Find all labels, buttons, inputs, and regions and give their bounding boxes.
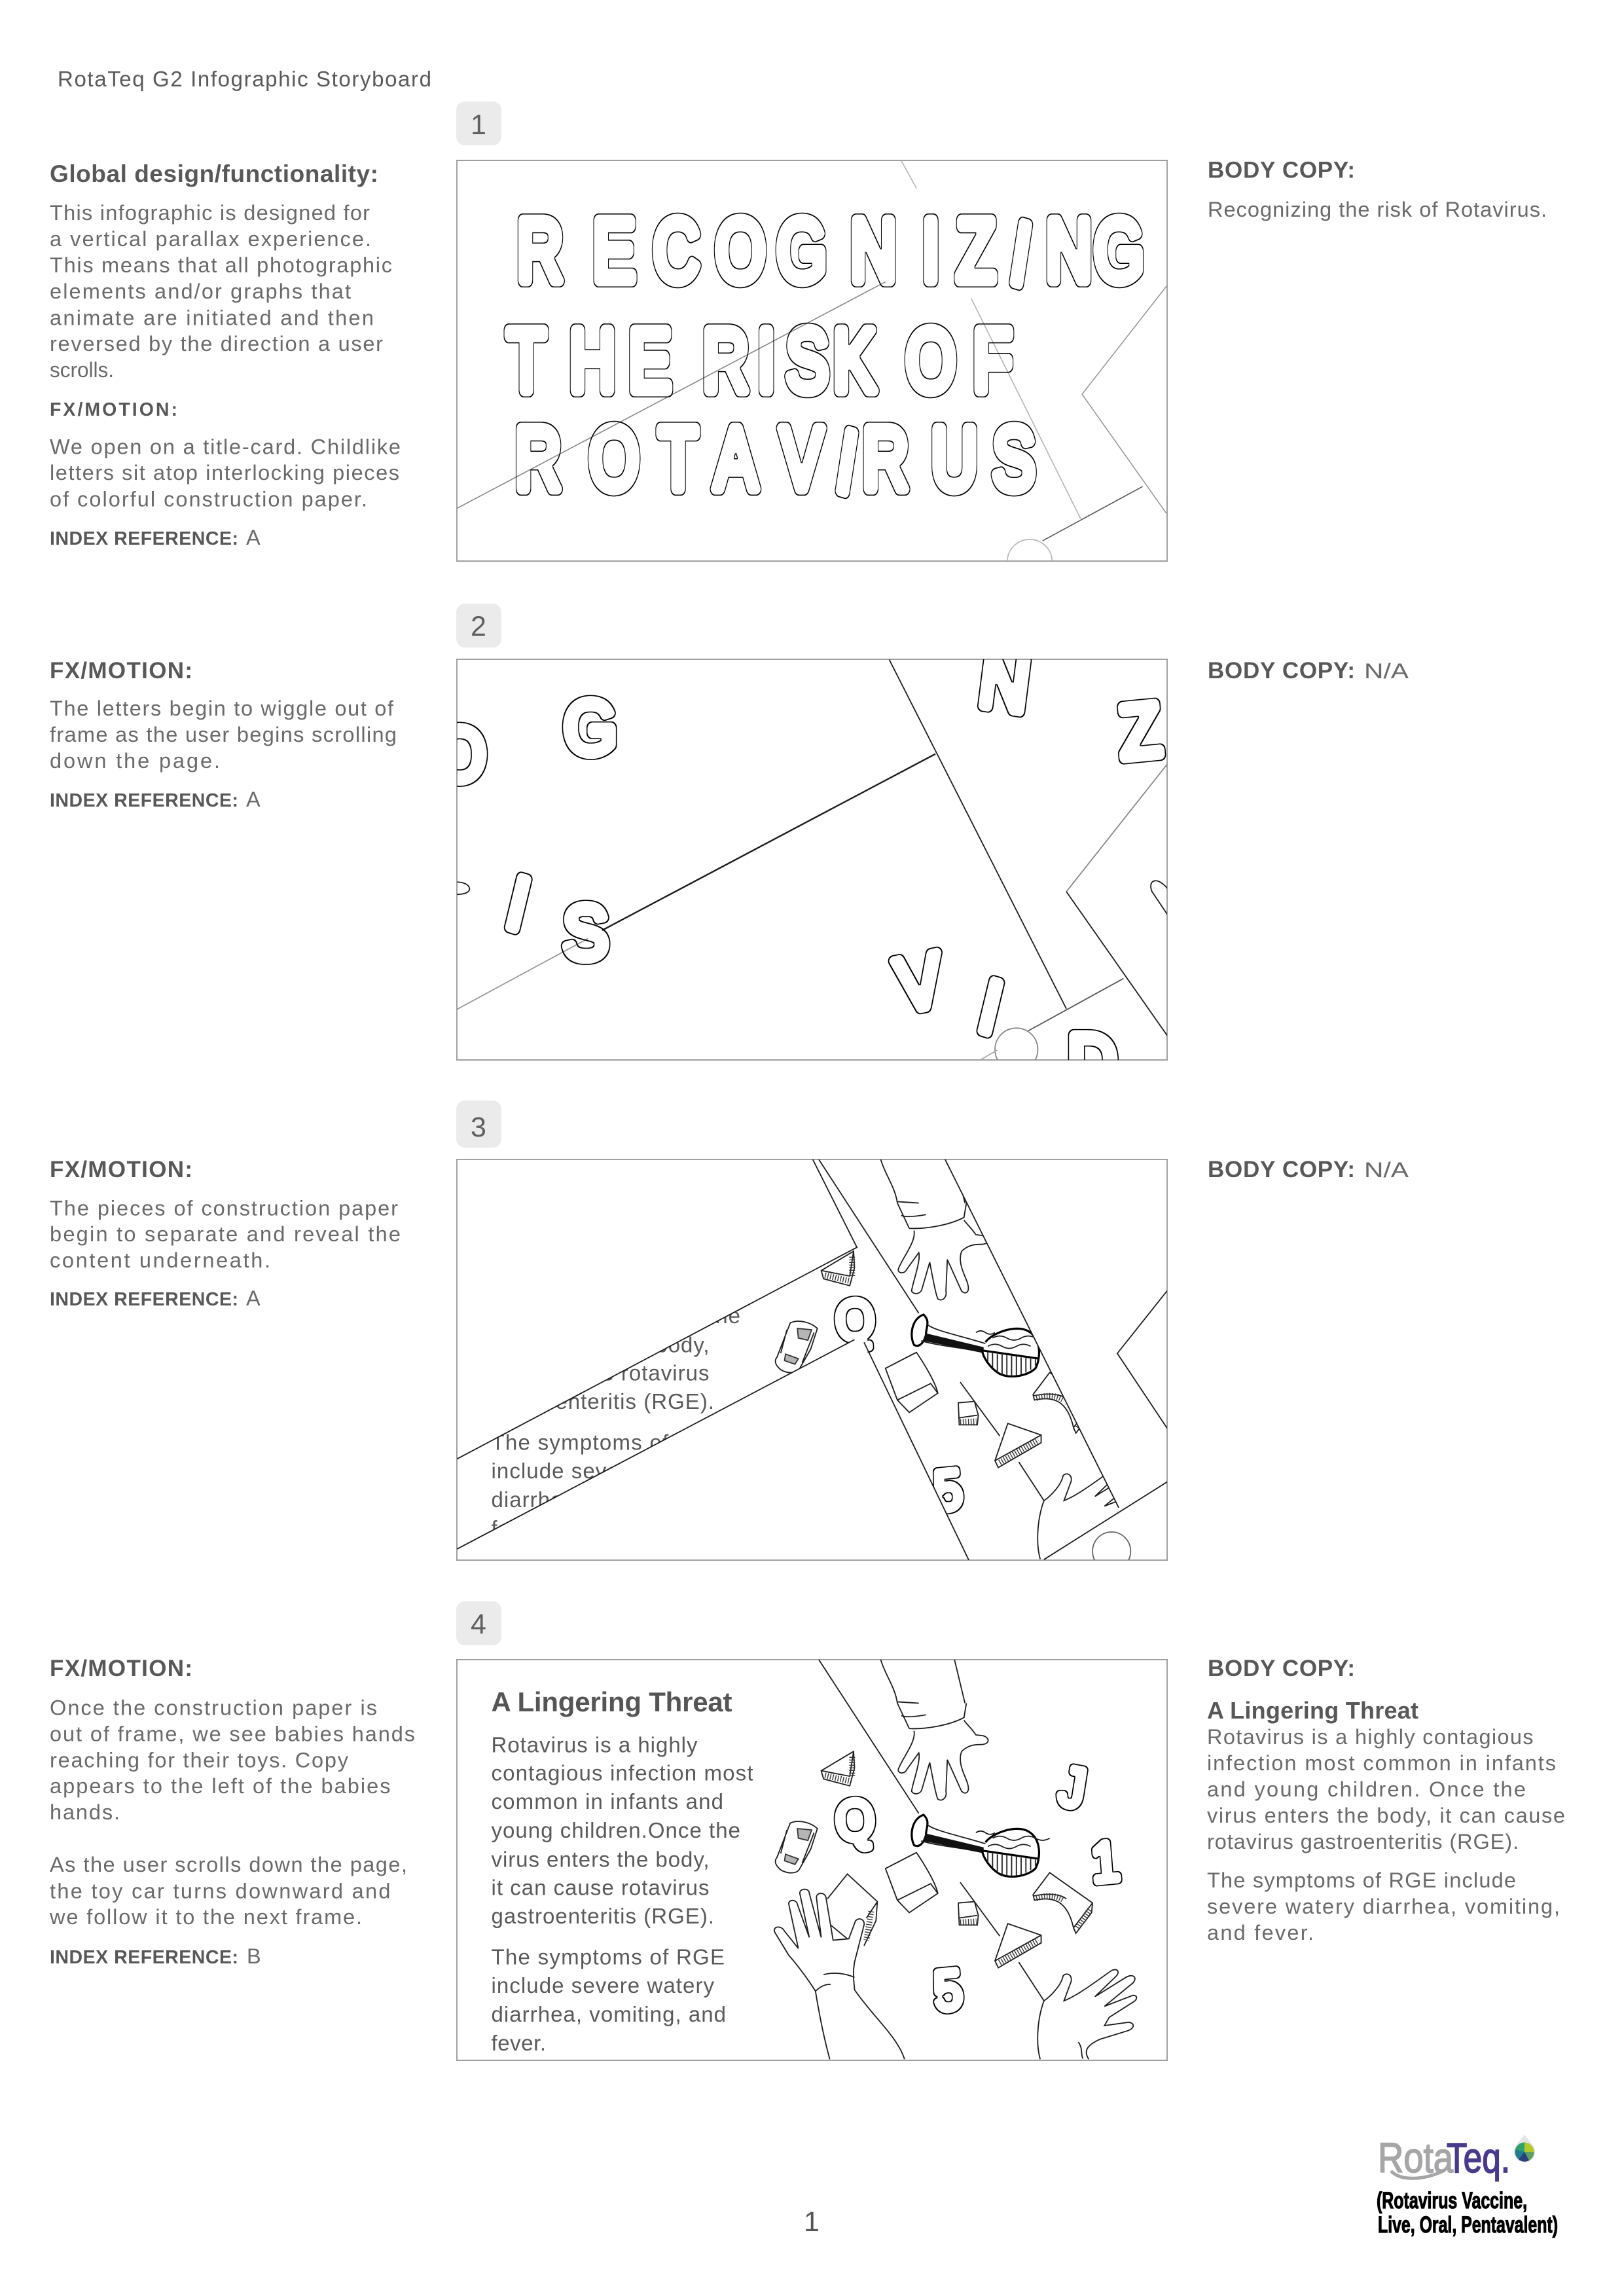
text: motion description 1: letters sit atop interlocking pieces bbox=[50, 461, 399, 484]
panel: frame 3 notes: INDEX REFERENCE: bbox=[50, 1289, 238, 1310]
panel: frame 4 notes: INDEX REFERENCE: bbox=[50, 1947, 238, 1968]
panel: frame 2 notes: FX/MOTION: bbox=[50, 658, 192, 683]
panel: frame 2 notes: INDEX REFERENCE: bbox=[50, 790, 238, 811]
tab: frame number 3 bbox=[456, 1101, 501, 1148]
construction paper lines bbox=[457, 160, 1168, 583]
text: threat copy: virus enters the body, bbox=[491, 1848, 710, 1871]
tab: frame number 2: 2 bbox=[471, 611, 486, 642]
heading: global design: Global design/functionality: bbox=[50, 160, 378, 187]
revealed copy: fever. bbox=[491, 1516, 546, 1540]
text: threat copy: The symptoms of RGE bbox=[491, 1944, 725, 1969]
page number: 1 bbox=[804, 2206, 820, 2238]
panel: frame 4 notes: FX/MOTION: bbox=[50, 1656, 192, 1681]
logo descriptor: (Rotavirus Vaccine, bbox=[1377, 2188, 1527, 2214]
panel: frame 4 body copy: severe watery diarrhea, vomiting, bbox=[1207, 1895, 1560, 1918]
text: threat copy: fever. bbox=[491, 2031, 546, 2055]
heading: A Lingering Threat: A Lingering Threat bbox=[491, 1686, 732, 1717]
panel: frame 4 notes: out of frame, we see babies hands bbox=[50, 1722, 415, 1745]
panel: frame 4 body copy: infection most common in infants bbox=[1207, 1751, 1556, 1775]
revealed copy bbox=[491, 1303, 740, 1540]
text: threat copy: it can cause rotavirus bbox=[491, 1875, 710, 1900]
panel: frame 4 body copy: Rotavirus is a highly contagious bbox=[1207, 1725, 1533, 1749]
text: threat copy: diarrhea, vomiting, and bbox=[491, 2002, 726, 2026]
toy letters: QJ15 bbox=[833, 1755, 1122, 2023]
panel: frame 4 notes: the toy car turns downward and bbox=[50, 1879, 390, 1903]
icon: colored drop bbox=[1514, 2134, 1535, 2162]
panel: frame 2 notes: A bbox=[246, 788, 261, 811]
panel: frame 2 body copy: BODY COPY: bbox=[1208, 658, 1355, 683]
panel: frame 2 notes: The letters begin to wiggle out of bbox=[50, 697, 394, 720]
panel: frame 4 body copy: The symptoms of RGE include bbox=[1207, 1868, 1516, 1892]
separating paper lines bbox=[457, 660, 1168, 1071]
logo wordmark: Teq. bbox=[1447, 2134, 1510, 2181]
tab: frame number 2 bbox=[456, 604, 501, 647]
panel: frame 1 body copy: BODY COPY: bbox=[1208, 158, 1355, 183]
panel: frame 2 scattered letters sketch bbox=[456, 659, 1168, 1061]
panel: frame 4 body copy: A Lingering Threat bbox=[1207, 1697, 1418, 1724]
text: motion description 1: We open on a title-card. Childlike bbox=[50, 435, 401, 458]
sketched title letters: THERISKOF bbox=[507, 311, 1012, 410]
panel: frame 3 notes: FX/MOTION: bbox=[50, 1157, 192, 1182]
document title: RotaTeq G2 Infographic Storyboard bbox=[58, 67, 431, 91]
text: threat copy: common in infants and bbox=[491, 1789, 723, 1813]
sketched title letters: ROTAVIRUS bbox=[515, 409, 1035, 513]
paper edges bbox=[457, 1159, 1168, 1571]
scattered sketched letters: GONZISVID bbox=[433, 638, 1164, 1103]
logo wordmark: Rota bbox=[1378, 2134, 1453, 2181]
illustration: hands and toys bbox=[774, 1660, 1136, 2059]
panel: frame 1 body copy: Recognizing the risk of Rotavirus. bbox=[1208, 198, 1547, 221]
revealed copy: young children.Once the bbox=[491, 1303, 740, 1328]
panel: frame 4 notes: we follow it to the next frame. bbox=[49, 1905, 362, 1929]
panel: frame 4 body copy: and fever. bbox=[1207, 1921, 1314, 1944]
text: threat copy: gastroenteritis (RGE). bbox=[491, 1904, 714, 1928]
logo swoosh bbox=[1391, 2171, 1443, 2178]
panel: frame 1 body copy bbox=[1208, 158, 1547, 221]
panel: frame 3 notes: begin to separate and reveal the bbox=[50, 1222, 401, 1246]
panel: frame 4 notes bbox=[49, 1656, 415, 1968]
text: threat copy: Rotavirus is a highly bbox=[491, 1732, 698, 1757]
panel: frame 3 notes: The pieces of construction paper bbox=[50, 1197, 398, 1220]
panel: frame 2 notes bbox=[50, 658, 397, 811]
revealed copy: diarrhea, vomiting, and bbox=[491, 1487, 726, 1512]
text: design description: animate are initiated and then bbox=[50, 306, 374, 330]
text: design description: reversed by the direction a user bbox=[50, 332, 383, 355]
panel: frame 4 notes: hands. bbox=[50, 1800, 120, 1824]
sketched title letters: RECOGNIZING bbox=[517, 201, 1144, 304]
text: motion description 1 bbox=[50, 435, 401, 511]
panel: frame 4 body copy: and young children. Once the bbox=[1207, 1777, 1526, 1801]
revealed copy: gastroenteritis (RGE). bbox=[491, 1389, 714, 1413]
panel: frame 1 title card sketch bbox=[457, 160, 1168, 583]
panel: frame 4 body copy: BODY COPY: bbox=[1208, 1656, 1355, 1681]
text: design description: a vertical parallax experience. bbox=[50, 227, 371, 251]
revealed copy: virus enters the body, bbox=[491, 1333, 710, 1357]
panel: frame 4 notes: B bbox=[247, 1944, 261, 1968]
panel: frame 4 notes: reaching for their toys. Copy bbox=[50, 1748, 349, 1772]
panel: frame 4 body copy: virus enters the body, it can cause bbox=[1207, 1804, 1565, 1827]
panel: frame 2 notes: down the page. bbox=[50, 749, 220, 773]
text: design description bbox=[50, 201, 392, 382]
tab: frame number 4 bbox=[456, 1601, 501, 1645]
panel: frame 3 notes: A bbox=[246, 1286, 261, 1310]
panel: frame 4 notes: As the user scrolls down the page, bbox=[50, 1853, 407, 1876]
logo descriptor: Live, Oral, Pentavalent) bbox=[1378, 2212, 1558, 2238]
text: design description: elements and/or graphs that bbox=[50, 280, 351, 303]
panel: frame 4 notes: Once the construction paper is bbox=[50, 1696, 377, 1719]
panel: frame 4 body copy bbox=[1207, 1656, 1565, 1944]
panel: frame 2 body copy: N/A bbox=[1364, 659, 1409, 683]
panel: frame 4 babies hands and copy bbox=[457, 1660, 1167, 2060]
text: design description: scrolls. bbox=[50, 358, 114, 382]
panel: frame 4 notes: appears to the left of the babies bbox=[50, 1774, 390, 1798]
revealed toys and hands: Q5 bbox=[833, 1288, 964, 1523]
panel: frame 3 body copy: BODY COPY: bbox=[1208, 1157, 1355, 1182]
text: threat copy bbox=[491, 1732, 753, 2055]
revealed copy: The symptoms of RGE bbox=[491, 1430, 725, 1455]
heading: FX/motion 1: FX/MOTION: bbox=[50, 399, 177, 420]
tab: frame number 1 bbox=[456, 101, 501, 145]
panel: frame 3 notes: content underneath. bbox=[50, 1248, 270, 1272]
tab: frame number 3: 3 bbox=[471, 1112, 486, 1143]
revealed copy: it can cause rotavirus bbox=[491, 1360, 710, 1385]
panel: frame 3 notes bbox=[50, 1157, 401, 1310]
tab: frame number 1: 1 bbox=[471, 109, 486, 141]
revealed copy: include severe watery bbox=[491, 1459, 715, 1483]
sketched title letters bbox=[507, 201, 1144, 513]
panel: frame 4 body copy: rotavirus gastroenteritis (RGE). bbox=[1207, 1830, 1519, 1853]
panel: frame 3 paper separating sketch bbox=[457, 1159, 1168, 1571]
text: threat copy: include severe watery bbox=[491, 1973, 715, 1997]
index reference 1: A bbox=[246, 526, 261, 549]
panel: frame 2 notes: frame as the user begins scrolling bbox=[50, 723, 397, 746]
logo: RotaTeq bbox=[1377, 2134, 1558, 2238]
text: threat copy: young children.Once the bbox=[491, 1818, 740, 1842]
panel: frame 1 notes bbox=[50, 160, 401, 549]
index reference 1: INDEX REFERENCE: bbox=[50, 528, 238, 549]
panel: frame 3 body copy: N/A bbox=[1364, 1158, 1409, 1182]
text: design description: This infographic is designed for bbox=[50, 201, 370, 225]
text: motion description 1: of colorful construction paper. bbox=[50, 487, 367, 511]
text: design description: This means that all photographic bbox=[50, 253, 392, 277]
text: threat copy: contagious infection most bbox=[491, 1761, 753, 1785]
tab: frame number 4: 4 bbox=[471, 1609, 486, 1640]
revealed toys and hands bbox=[774, 1159, 1136, 1559]
logo descriptor bbox=[1377, 2188, 1558, 2238]
